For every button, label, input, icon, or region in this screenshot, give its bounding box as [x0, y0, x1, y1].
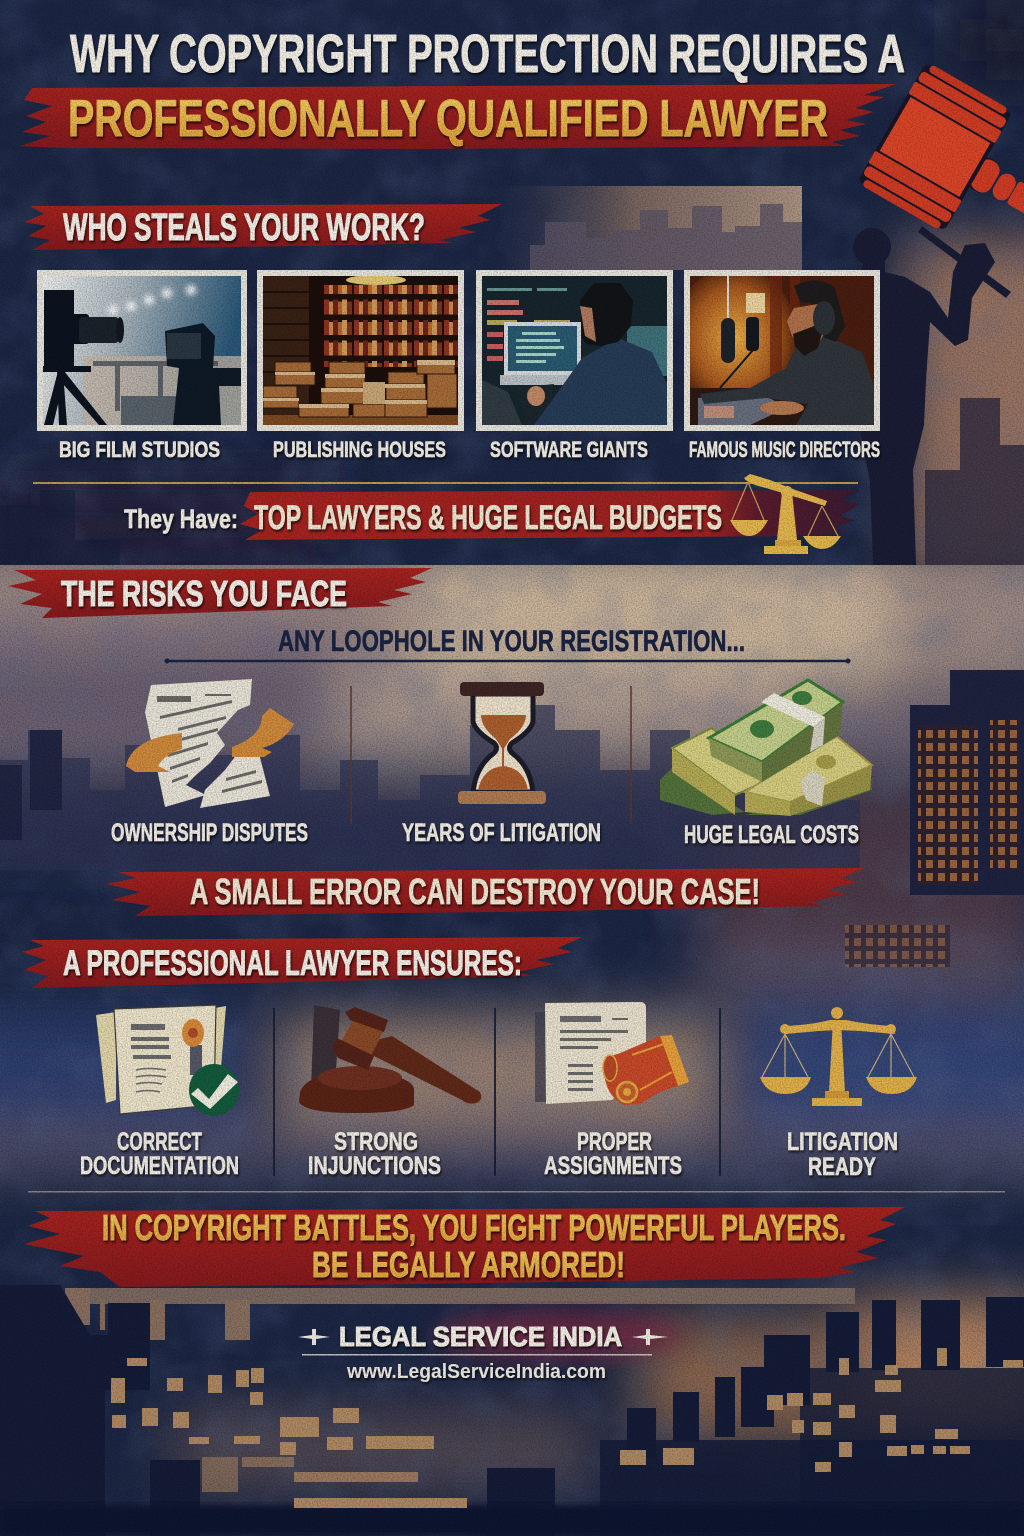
they have callout: TOP LAWYERS & HUGE LEGAL BUDGETS — [254, 499, 722, 537]
they have callout — [124, 490, 860, 540]
conclusion banner: BE LEGALLY ARMORED! — [312, 1244, 625, 1285]
section heading: lawyer ensures — [22, 937, 582, 988]
icon: assignment document with scroll — [535, 1002, 689, 1105]
label: proper assignments: ASSIGNMENTS — [544, 1152, 682, 1180]
gavel — [857, 61, 1024, 288]
brand logo — [298, 1321, 668, 1383]
label: software giants: SOFTWARE GIANTS — [490, 437, 648, 462]
icon: scales in callout — [730, 474, 841, 554]
subheading: loophole — [164, 625, 850, 664]
divider marks — [351, 686, 631, 824]
section heading: risks — [8, 568, 432, 618]
label: litigation ready: LITIGATION — [787, 1128, 898, 1156]
subheading: loophole: ANY LOOPHOLE IN YOUR REGISTRATION... — [278, 625, 745, 658]
label: correct documentation — [80, 1128, 239, 1180]
label: correct documentation: CORRECT — [117, 1128, 202, 1156]
brand logo: www.LegalServiceIndia.com — [346, 1361, 606, 1383]
silhouette of man with gavel — [853, 226, 1011, 565]
section heading: lawyer ensures: A PROFESSIONAL LAWYER ENSURES: — [63, 944, 522, 983]
label: famous music directors: FAMOUS MUSIC DIRECTORS — [689, 437, 880, 462]
warning banner — [106, 868, 864, 916]
risks section skyline — [0, 670, 1024, 967]
label: big film studios: BIG FILM STUDIOS — [59, 437, 220, 462]
label: publishing houses: PUBLISHING HOUSES — [273, 437, 446, 462]
label: proper assignments: PROPER — [577, 1128, 652, 1156]
label: strong injunctions: STRONG — [334, 1128, 418, 1156]
label: years of litigation: YEARS OF LITIGATION — [402, 819, 601, 847]
icon: torn document with arrows — [126, 679, 294, 808]
label: litigation ready: READY — [808, 1153, 876, 1181]
icon: large scales — [760, 1007, 917, 1106]
photo: publishing houses — [257, 270, 464, 431]
photo: big film studios — [37, 270, 247, 431]
right side skyline — [925, 398, 1024, 565]
photo: famous music directors — [673, 266, 880, 431]
section heading: risks: THE RISKS YOU FACE — [61, 573, 347, 614]
label: ownership disputes: OWNERSHIP DISPUTES — [111, 819, 308, 847]
label: correct documentation: DOCUMENTATION — [80, 1152, 239, 1180]
conclusion banner — [24, 1207, 905, 1287]
gavel handle — [964, 153, 1024, 243]
icon: hourglass — [458, 682, 546, 804]
brand logo: LEGAL SERVICE INDIA — [339, 1321, 622, 1352]
they have callout: They Have: — [124, 504, 238, 534]
icon: correct documentation — [96, 1005, 239, 1116]
upper skyline panel — [500, 186, 802, 270]
label: huge legal costs: HUGE LEGAL COSTS — [684, 821, 859, 849]
left upper skyline — [0, 490, 120, 565]
photo: software giants — [476, 270, 673, 431]
icon: money stacks — [660, 680, 872, 816]
label: strong injunctions: INJUNCTIONS — [308, 1152, 441, 1180]
warning banner: A SMALL ERROR CAN DESTROY YOUR CASE! — [190, 871, 760, 912]
icon: wooden gavel — [299, 1005, 481, 1113]
gold divider — [33, 482, 858, 484]
label: proper assignments — [544, 1128, 682, 1180]
dividers — [274, 1008, 720, 1176]
label: litigation ready — [787, 1128, 898, 1181]
section heading: who steals: WHO STEALS YOUR WORK? — [63, 207, 425, 249]
bottom skyline — [0, 1285, 1024, 1536]
label: strong injunctions — [308, 1128, 441, 1180]
divider line — [28, 1191, 1005, 1192]
brand glow — [435, 1311, 685, 1359]
